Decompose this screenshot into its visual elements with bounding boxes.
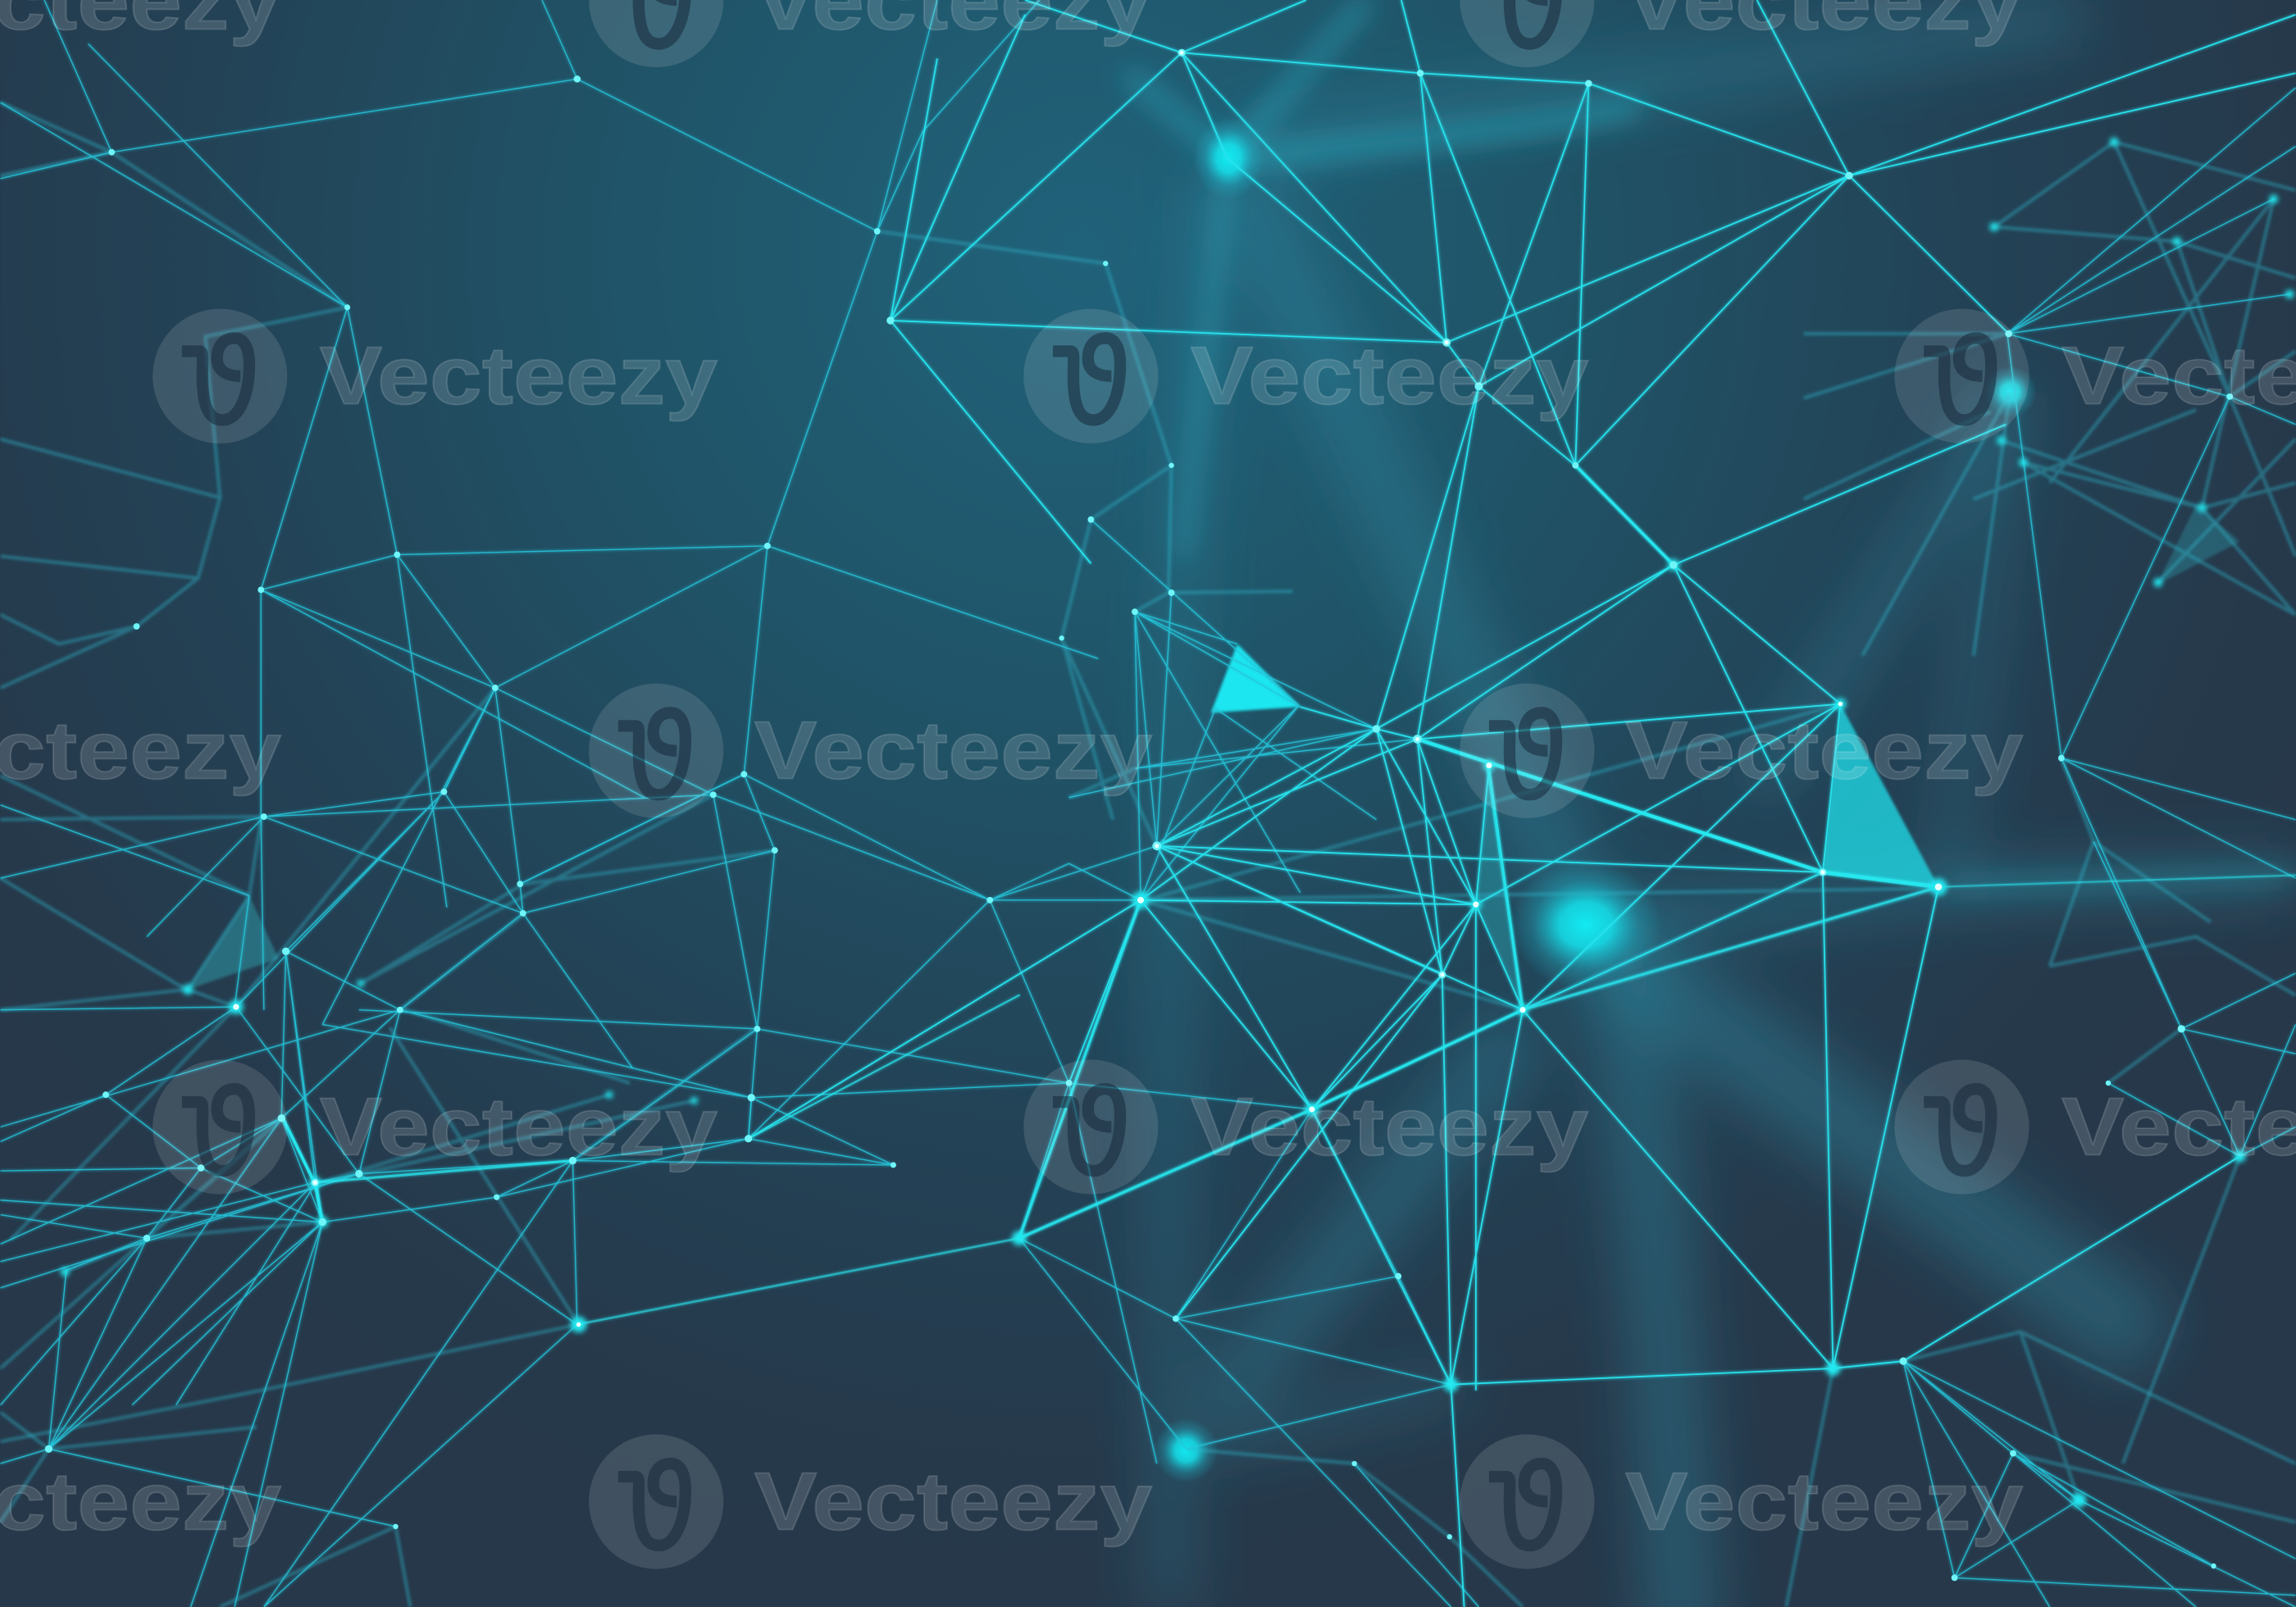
blurred light bands [1128,0,2295,1607]
watermark row 4: Vecteezy [1625,1456,2024,1547]
network lines: thick highlighted edges [283,466,2295,1324]
network lines: bright [749,0,2295,1607]
watermark row 4 [0,1434,2024,1569]
watermark row 2 [0,684,2024,818]
watermark row 2: Vecteezy [1625,706,2024,797]
bright node cores [233,51,1942,1327]
watermark row 3: Vecteezy [320,1081,718,1172]
watermark row 1: Vecteezy [320,331,718,422]
watermark row 3 [153,1059,2296,1195]
blurred glowing spots [1154,117,2037,1482]
watermark row 3: Vecteezy [1191,1081,1589,1172]
watermark row 4: Vecteezy [754,1456,1153,1547]
watermark row 1 [153,309,2296,444]
watermark row 0 [0,0,2024,67]
watermark row 2: Vecteezy [754,706,1153,797]
watermark row 1: Vecteezy [1191,331,1589,422]
filled triangles [188,505,2240,1010]
